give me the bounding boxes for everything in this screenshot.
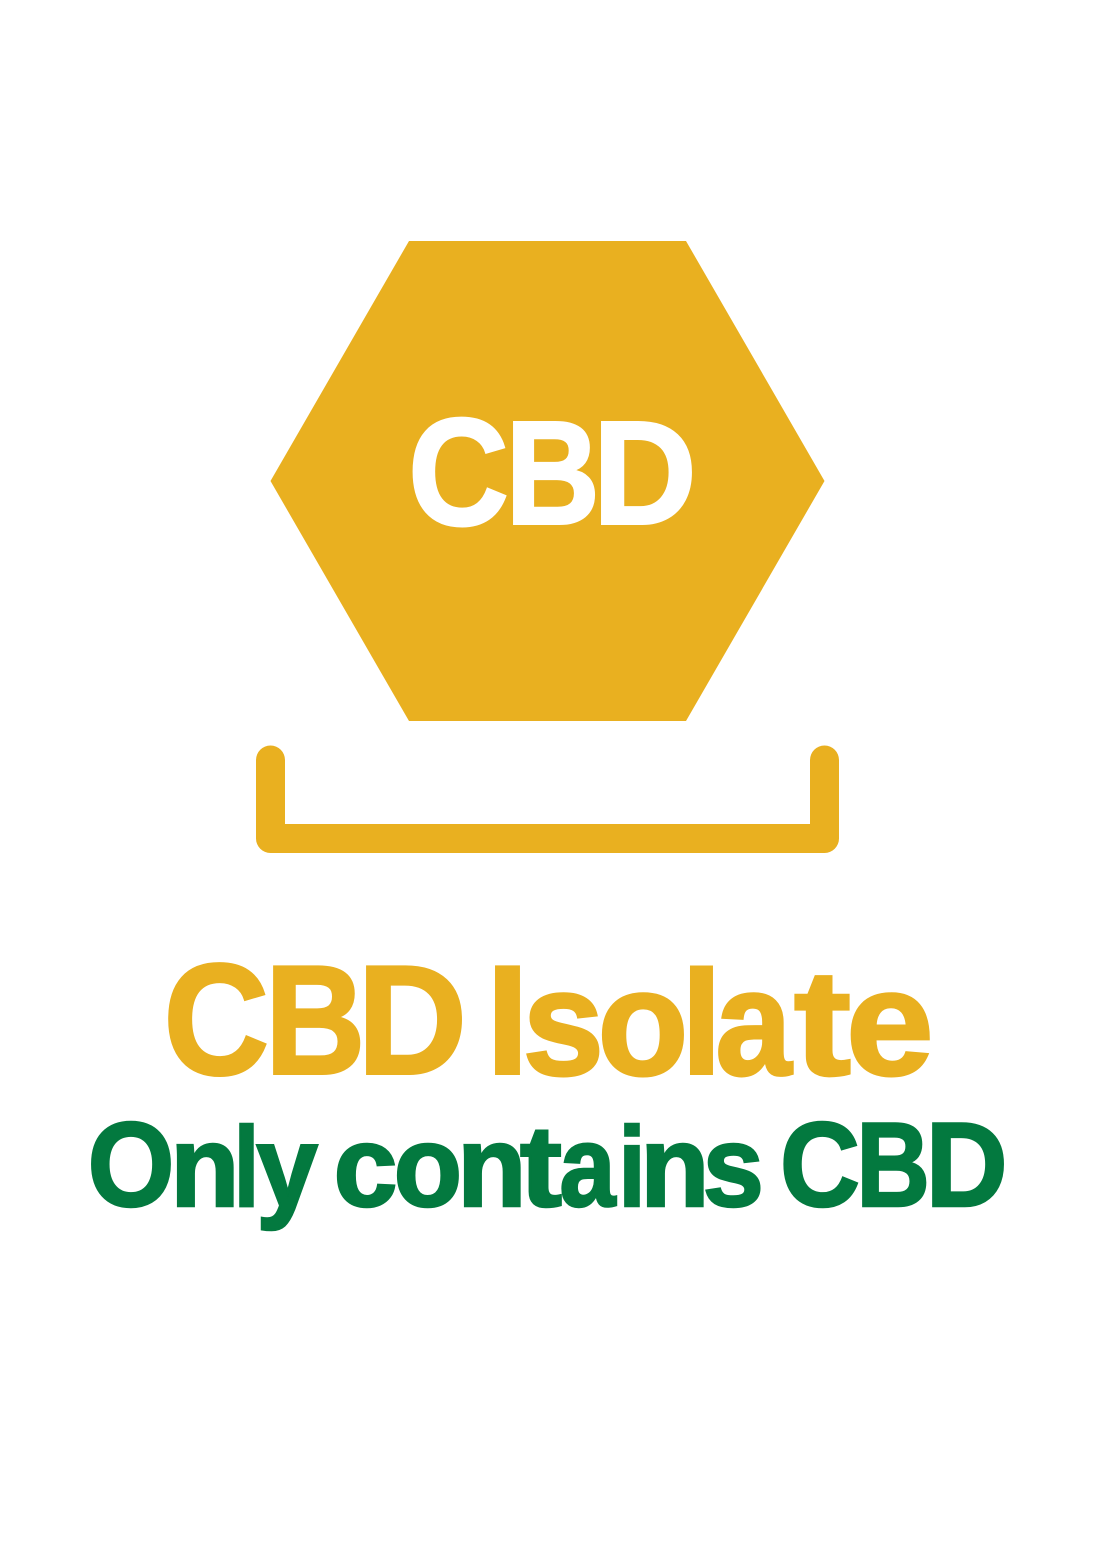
- subheading: Only contains CBD: O: [88, 1098, 174, 1232]
- subheading: Only contains CBD: C: [780, 1098, 860, 1232]
- subheading: Only contains CBD: a: [560, 1103, 616, 1231]
- subheading: Only contains CBD: n: [457, 1103, 526, 1231]
- bracket: [270, 760, 824, 838]
- heading: CBD Isolate: o: [598, 938, 688, 1106]
- icon: hexagon with CBD: [270, 241, 824, 721]
- subheading: Only contains CBD: D: [926, 1098, 1008, 1232]
- subheading: Only contains CBD: t: [520, 1103, 562, 1231]
- heading: CBD Isolate: a: [716, 938, 793, 1106]
- heading: CBD Isolate: D: [357, 934, 467, 1106]
- heading: CBD Isolate: C: [164, 932, 269, 1108]
- subheading: Only contains CBD: c: [334, 1103, 397, 1231]
- heading: CBD Isolate: B: [265, 934, 365, 1106]
- subheading: Only contains CBD: o: [394, 1103, 462, 1231]
- heading: CBD Isolate: I: [486, 934, 529, 1106]
- heading: CBD Isolate: t: [794, 938, 851, 1106]
- heading: CBD Isolate: l: [681, 942, 722, 1106]
- subheading: Only contains CBD: i: [618, 1104, 646, 1231]
- subheading: Only contains CBD: l: [234, 1104, 259, 1231]
- subheading: Only contains CBD: n: [640, 1103, 710, 1231]
- heading: CBD Isolate: e: [846, 938, 934, 1106]
- subheading: Only contains CBD: B: [856, 1098, 930, 1232]
- subheading: Only contains CBD: s: [703, 1103, 764, 1231]
- subheading: Only contains CBD: n: [170, 1103, 240, 1231]
- hexagon label: D: [593, 391, 697, 556]
- hexagon label: B: [505, 391, 600, 556]
- subheading: Only contains CBD: y: [256, 1103, 318, 1231]
- heading: CBD Isolate: s: [523, 938, 604, 1106]
- hexagon label: C: [408, 387, 509, 558]
